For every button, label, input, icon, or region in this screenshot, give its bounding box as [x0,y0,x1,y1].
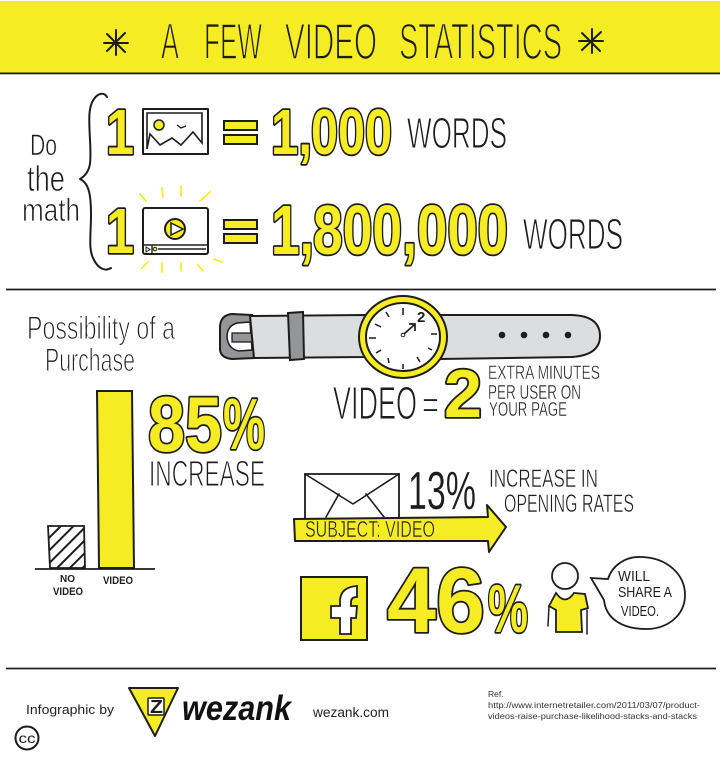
title: VIDEO [285,13,377,70]
title: FEW [204,13,262,70]
row: video equals 1,800,000 words: 1 [106,195,134,267]
stat: 13%: 13% [408,461,476,521]
brace [80,94,111,270]
title [161,13,562,70]
panel: facebook share [301,550,685,652]
callout: will share a video: SHARE A [618,584,672,601]
icon: video player with rays [140,186,222,272]
callout: will share a video: VIDEO. [621,603,659,620]
panel: do the math [22,94,623,272]
header band [0,1,720,74]
side label: do the math: math [22,192,80,228]
bar: video [97,391,134,587]
stat: 46%: 46 [387,550,485,652]
row: video equals 1,800,000 words [106,186,623,272]
text: increase in opening rates: OPENING RATES [504,490,634,518]
number: 1,000 [271,96,392,168]
logo: wezank: Z [150,697,163,717]
reference [488,689,700,721]
number: 1,800,000: 1, [271,191,314,269]
stat: 85% increase: INCREASE [149,453,265,494]
stat: video equals 2 [333,356,600,432]
icon: watch: 2 [417,309,425,326]
text: increase in opening rates: INCREASE IN [489,465,598,493]
stat: video equals 2: 2 [444,356,482,432]
stat: 85% increase [148,380,265,494]
icon: creative commons [16,726,38,750]
row: photo equals 1,000 words [106,96,507,168]
bar: video: VIDEO [103,575,133,587]
heading: Purchase [45,342,135,378]
stat: video equals 2: = [422,383,439,427]
arrow: subject video [294,505,506,552]
reference: http://www.internetretailer.com/2011/03/07/product- [488,700,700,710]
callout: will share a video: WILL [618,568,650,585]
reference: videos-raise-purchase-likelihood-stacks-and-stacks [488,711,697,721]
heading: Possibility of a [27,310,175,346]
stat: video equals 2: YOUR PAGE [489,399,567,421]
row: photo equals 1,000 words: 1 [106,96,134,168]
logo: wezank: wezank [182,689,292,728]
bar: no video: NO [60,574,75,585]
side label: do the math [22,129,80,228]
bar: no video: VIDEO [53,586,83,598]
equals sign [224,220,257,243]
text: increase in opening rates [489,465,634,518]
stat: video equals 2: PER USER ON [488,382,581,404]
icon: left asterisk [104,30,128,55]
stat: 85% increase: 85 [148,380,222,468]
icon: envelope [305,474,399,520]
heading [27,310,175,378]
side label: do the math: Do [30,129,57,162]
icon: right asterisk [579,29,603,53]
icon: watch [220,296,600,378]
stat: 85% increase: % [223,385,265,465]
logo: wezank [129,688,292,736]
icon: creative commons: cc [18,730,36,746]
bar chart [35,391,155,598]
title: A [161,13,179,70]
stat: 46%: % [488,571,528,647]
website: wezank.com [312,705,389,720]
number: 1,000: 000 [311,96,392,168]
title: STATISTICS [399,13,562,70]
arrow: subject video: SUBJECT: VIDEO [305,516,435,542]
credit label: Infographic by [26,702,115,717]
panel: email [294,461,634,552]
panel: footer [16,688,700,750]
stat: video equals 2: EXTRA MINUTES [488,363,600,384]
number: 1,000: 1, [271,96,312,168]
side label: do the math: the [27,158,65,199]
icon: facebook [301,577,367,640]
number: 1,800,000: 000 [417,191,508,269]
reference: Ref. [488,689,504,699]
panel: possibility of a purchase [27,310,265,598]
equals sign [224,121,257,144]
bar: no video [48,526,85,598]
callout: will share a video [591,557,685,629]
icon: photo [143,109,208,154]
stat: video equals 2: VIDEO [333,377,417,429]
number: 1,800,000 [271,191,508,269]
row: photo equals 1,000 words: WORDS [407,109,507,158]
panel: watch [220,296,600,432]
divider lines [6,290,716,668]
number: 1,800,000: 800, [313,191,417,269]
icon: person [548,563,588,634]
row: video equals 1,800,000 words: WORDS [523,210,623,259]
